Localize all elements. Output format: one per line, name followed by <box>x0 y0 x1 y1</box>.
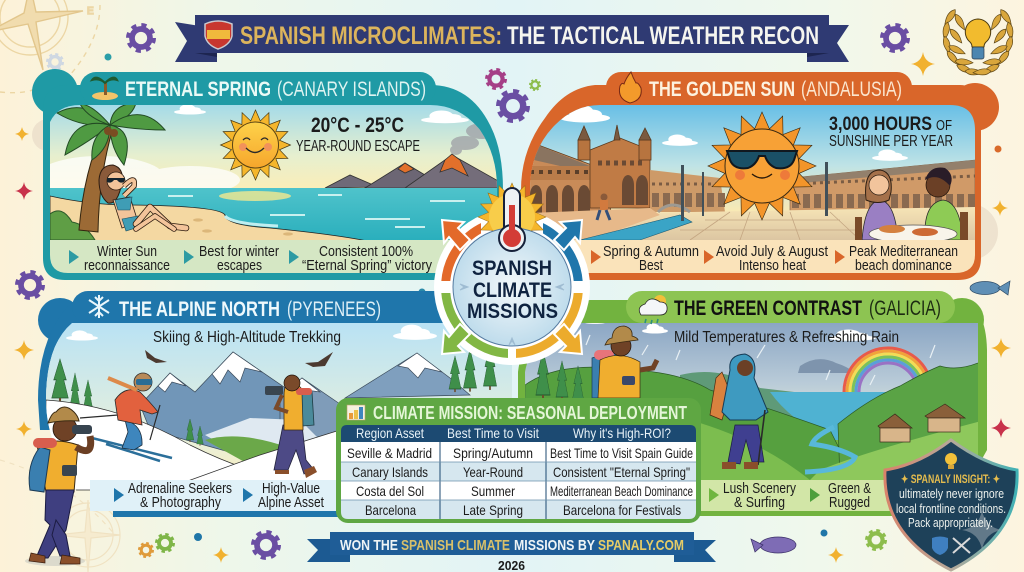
table body: Best Time to Visit Spain Guide <box>550 445 693 461</box>
beach scene <box>35 103 500 274</box>
mission bullets: Rugged <box>829 494 870 511</box>
heading text: THE ALPINE NORTH <box>119 298 280 321</box>
panel: eternal spring: (CANARY ISLANDS) <box>277 78 426 101</box>
green arrow <box>440 292 509 359</box>
table body: Mediterranean Beach Dominance <box>550 483 693 499</box>
table body: Consistent "Eternal Spring" <box>553 464 690 480</box>
sunshine callout: 3,000 HOURS <box>829 113 932 135</box>
mission strip <box>50 240 450 273</box>
sunbathing woman <box>99 165 186 231</box>
mission bullets: Best <box>639 257 664 274</box>
hub label: MISSIONS <box>467 300 558 323</box>
mission bullets: Green & <box>828 480 871 497</box>
table body: Canary Islands <box>352 464 428 480</box>
mission bullets: Alpine Asset <box>258 494 325 511</box>
galicia scene <box>520 316 985 511</box>
mission bullets: Avoid July & August <box>716 243 829 260</box>
compass rose top left <box>0 0 100 93</box>
sand <box>50 196 372 242</box>
hub label: CLIMATE <box>473 279 552 302</box>
icon: sun with sunglasses <box>708 112 816 220</box>
mission bullets: Consistent 100% <box>319 243 413 260</box>
icon: crossed swords <box>953 538 970 553</box>
panel: alpine north: (PYRENEES) <box>287 298 381 321</box>
table body: Barcelona <box>365 502 416 518</box>
temperature callout <box>296 114 420 155</box>
panel frame <box>521 83 999 280</box>
table header: Best Time to Visit <box>447 425 539 441</box>
mission bullets: & Surfing <box>734 494 785 511</box>
icon: fish top right <box>970 281 1010 295</box>
skier <box>80 373 172 461</box>
mission bullets: High-Value <box>262 480 320 497</box>
panel frame <box>32 69 503 280</box>
panel frame <box>518 298 987 516</box>
panel: eternal spring <box>32 69 503 280</box>
icon: thermometer <box>499 188 525 251</box>
cabins <box>878 404 965 442</box>
canal <box>580 215 692 240</box>
mission bullets: & Photography <box>140 494 221 511</box>
mission strip <box>700 480 895 511</box>
bush <box>50 211 95 240</box>
table body: Seville & Madrid <box>347 445 432 461</box>
compass rose top left: E <box>87 6 94 17</box>
panel: golden sun <box>521 72 999 280</box>
footer text: MISSIONS BY <box>514 537 595 554</box>
icon: sun behind thermometer <box>478 183 546 251</box>
mission bullets: Peak Mediterranean <box>849 243 958 260</box>
green hills <box>525 366 839 480</box>
yellow arrow <box>515 292 584 359</box>
footer text: WON THE <box>340 537 398 554</box>
pill heading <box>72 291 510 323</box>
mission bullets: Winter Sun <box>97 243 157 260</box>
title banner: THE TACTICAL WEATHER RECON <box>507 22 819 50</box>
seasonal deployment table <box>336 398 701 523</box>
compass rose bottom left <box>0 460 120 572</box>
mission bullets: “Eternal Spring” victory <box>302 257 432 274</box>
heading text: THE GOLDEN SUN <box>649 78 795 101</box>
central hub: spanish climate missions <box>434 183 590 365</box>
table body: Spring/Autumn <box>453 445 533 461</box>
table rows <box>341 425 696 519</box>
hiker with hat <box>592 326 657 398</box>
temperature callout: YEAR-ROUND ESCAPE <box>296 138 420 155</box>
pill heading <box>80 72 436 104</box>
table body: Late Spring <box>463 502 523 518</box>
icon: laurel and lightbulb <box>941 8 1015 76</box>
mission bullets <box>709 480 871 511</box>
heading: SPANISH MICROCLIMATES: <box>240 22 502 50</box>
table body: Barcelona for Festivals <box>563 502 681 518</box>
icon: fish bottom <box>751 537 796 553</box>
walking figure <box>597 194 610 220</box>
sunshine callout <box>829 113 953 150</box>
palace distant wing <box>650 170 725 212</box>
icon: snowflake <box>89 295 109 318</box>
palace tower <box>578 125 651 208</box>
sunshine callout: OF <box>936 117 952 134</box>
snow slopes and meadow <box>205 418 317 444</box>
title banner <box>175 15 849 62</box>
icon: flame <box>619 72 641 103</box>
insight text <box>896 487 1006 530</box>
plaza ground <box>614 207 975 240</box>
table body: Costa del Sol <box>356 483 424 499</box>
subheading: Mild Temperatures & Refreshing Rain <box>674 329 899 346</box>
birds <box>145 350 333 367</box>
icon: lightbulb <box>945 453 957 469</box>
river <box>805 427 855 472</box>
table body: Summer <box>471 483 515 499</box>
mission bullets <box>591 243 958 274</box>
palace left wing <box>530 145 611 212</box>
plaza scene <box>525 105 980 274</box>
mountains <box>140 352 470 455</box>
footer text: SPANALY.COM <box>598 537 684 554</box>
mission bullets: Best for winter <box>199 243 279 260</box>
foreground hiker <box>25 407 92 566</box>
insight text: Pack appropriately. <box>908 516 993 530</box>
icon: small shield <box>932 536 948 555</box>
mission bullets: Spring & Autumn <box>603 243 699 260</box>
palm tree <box>57 103 165 232</box>
icon: bar chart <box>347 405 365 420</box>
table header: Region Asset <box>356 425 424 441</box>
far hills and lake <box>680 372 794 417</box>
mission bullets: Adrenaline Seekers <box>128 480 232 497</box>
pill heading <box>626 291 955 323</box>
sunshine callout: SUNSHINE PER YEAR <box>829 133 953 150</box>
icon: palm island <box>92 78 118 100</box>
blue arrow <box>542 220 584 282</box>
footer banner <box>307 532 716 562</box>
footer text: SPANISH CLIMATE <box>401 537 510 554</box>
volcanoes <box>325 154 500 188</box>
rainbow <box>842 346 928 392</box>
mission strip <box>574 240 975 273</box>
footer text <box>340 537 684 554</box>
lampposts <box>681 162 828 221</box>
table body <box>347 445 693 518</box>
trees <box>52 359 68 402</box>
mission bullets: beach dominance <box>855 257 952 274</box>
mission bullets: Lush Scenery <box>723 480 796 497</box>
mountain scene <box>46 323 516 512</box>
mission bullets: reconnaissance <box>84 257 170 274</box>
icon: rain cloud <box>639 295 667 324</box>
photographer <box>265 375 317 478</box>
mission bullets: escapes <box>217 257 262 274</box>
hub label: SPANISH <box>472 257 552 280</box>
table title: CLIMATE MISSION: SEASONAL DEPLOYMENT <box>373 403 687 423</box>
pill heading <box>606 72 912 104</box>
hooded hiker <box>710 354 768 469</box>
icon: spanish shield <box>205 21 232 49</box>
panel: alpine north <box>25 291 516 566</box>
mission bullets <box>114 480 325 511</box>
hub label <box>467 257 558 323</box>
diners <box>855 168 968 243</box>
mission bullets <box>69 243 432 274</box>
panel: green contrast: (GALICIA) <box>869 297 941 320</box>
panel: green contrast <box>518 291 987 516</box>
table header <box>356 425 671 441</box>
insight shield <box>885 440 1017 570</box>
table header: Why it's High-ROI? <box>573 425 671 441</box>
subheading: Skiing & High-Altitude Trekking <box>153 329 341 346</box>
mission bullets: Intenso heat <box>739 257 807 274</box>
trees <box>536 358 550 398</box>
decorative pale discs <box>32 119 998 260</box>
table body: Year-Round <box>463 464 523 480</box>
panel frame <box>38 298 440 517</box>
compass chevrons <box>460 284 564 345</box>
orange arrow <box>440 220 482 282</box>
icon: smiling sun <box>220 110 290 180</box>
panel: golden sun: (ANDALUSIA) <box>801 78 902 101</box>
heading text: ETERNAL SPRING <box>125 78 271 101</box>
temperature callout: 20°C - 25°C <box>311 114 404 137</box>
insight text: ultimately never ignore <box>899 487 1004 501</box>
heading text: THE GREEN CONTRAST <box>674 297 862 320</box>
inner disc <box>453 228 571 346</box>
